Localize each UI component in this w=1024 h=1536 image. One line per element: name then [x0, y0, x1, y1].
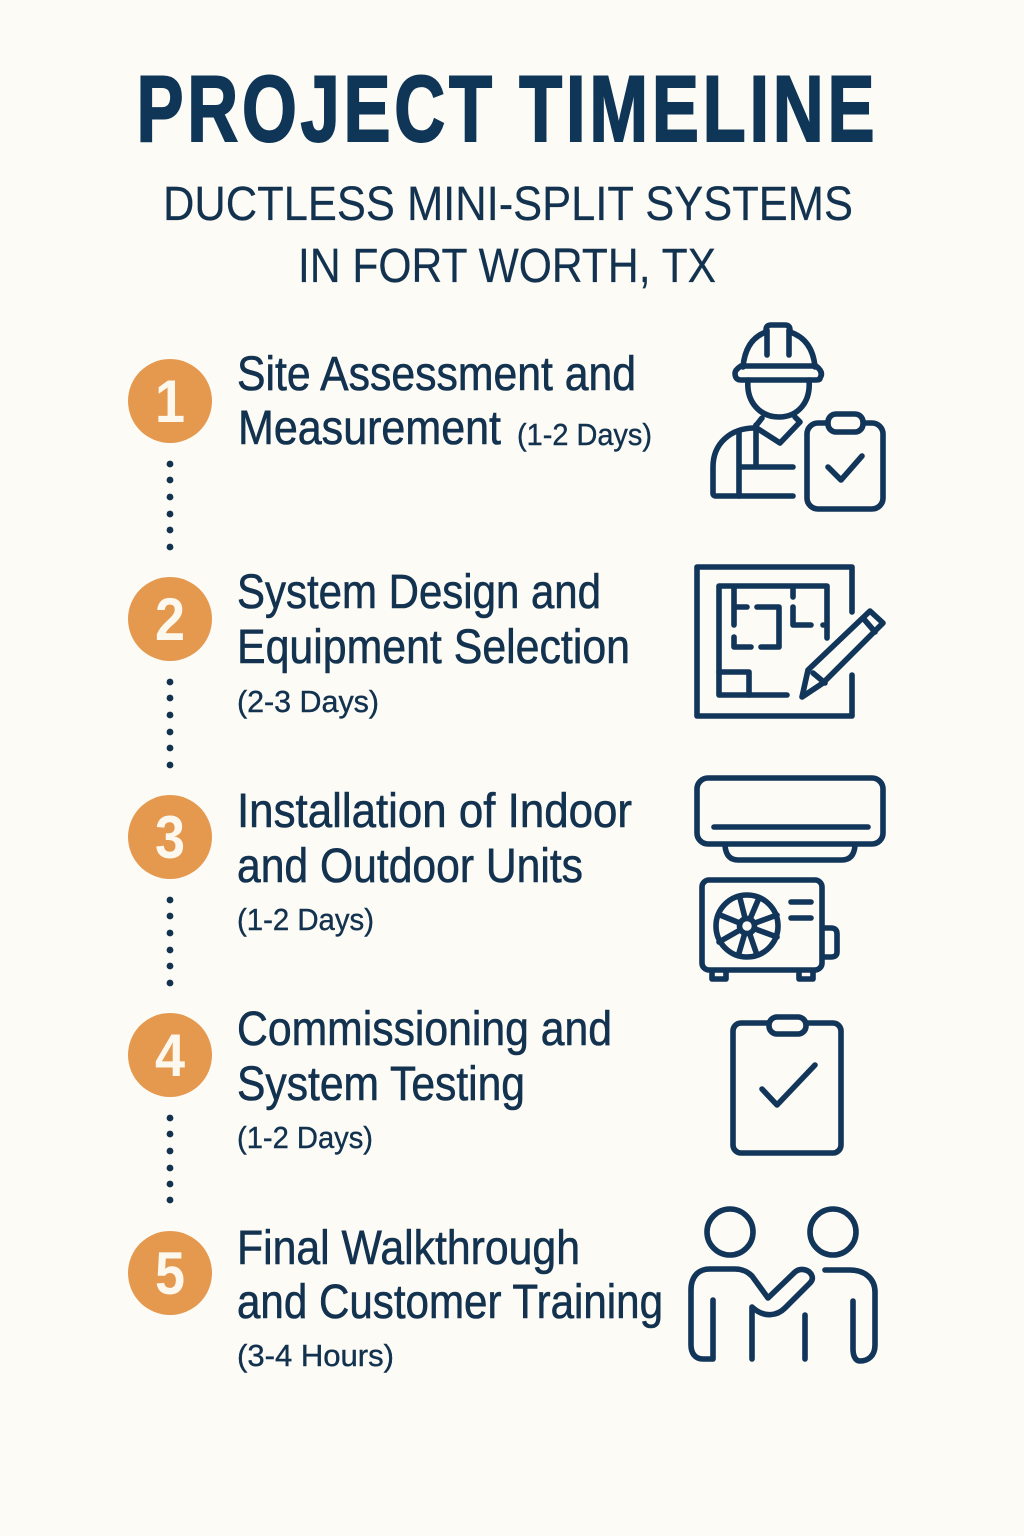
step 1 number badge: 1 — [155, 368, 185, 436]
step 1 text — [237, 348, 652, 455]
step 5 number badge — [128, 1231, 212, 1315]
step 1 number badge — [128, 359, 212, 443]
icon: handshake of two people — [691, 1209, 875, 1361]
step 3 — [128, 778, 883, 986]
icon: floor plan and pencil — [697, 567, 883, 716]
step 1 text: Measurement — [238, 402, 501, 455]
step 4 — [128, 1003, 841, 1203]
step 4 connector dots — [167, 1115, 173, 1203]
step 4 text: System Testing — [237, 1058, 525, 1111]
subtitle: IN FORT WORTH, TX — [298, 240, 716, 293]
step 3 text — [237, 785, 632, 937]
step 2 number badge: 2 — [155, 586, 185, 654]
step 5 text: and Customer Training — [237, 1276, 663, 1329]
step 3 text: (1-2 Days) — [237, 902, 374, 937]
step 3 number badge — [128, 795, 212, 879]
step 1 text: Site Assessment and — [237, 348, 636, 401]
step 4 number badge — [128, 1013, 212, 1097]
step 5 text: Final Walkthrough — [237, 1222, 580, 1275]
step 4 text — [237, 1003, 612, 1155]
step 5 text: (3-4 Hours) — [237, 1338, 394, 1373]
step 1 — [128, 325, 883, 550]
step 3 text: Installation of Indoor — [237, 785, 632, 838]
step 5 text — [237, 1222, 663, 1373]
step 2 text — [237, 566, 630, 719]
step 2 text: System Design and — [237, 566, 601, 619]
icon: worker with clipboard — [713, 325, 883, 509]
icon: indoor and outdoor units — [697, 778, 883, 979]
step 4 number badge: 4 — [155, 1022, 185, 1090]
icon: clipboard with check — [733, 1017, 841, 1153]
step 1 connector dots — [167, 461, 173, 550]
step 2 connector dots — [167, 679, 173, 768]
step 2 text: Equipment Selection — [237, 621, 630, 674]
step 2 — [128, 566, 883, 768]
step 1 text: (1-2 Days) — [517, 417, 652, 452]
step 2 number badge — [128, 577, 212, 661]
step 2 text: (2-3 Days) — [237, 684, 379, 719]
step 5 — [128, 1209, 875, 1373]
subtitle — [163, 178, 853, 293]
step 3 connector dots — [167, 897, 173, 986]
subtitle: DUCTLESS MINI-SPLIT SYSTEMS — [163, 178, 853, 231]
step 4 text: Commissioning and — [237, 1003, 612, 1056]
step 4 text: (1-2 Days) — [237, 1120, 373, 1155]
step 3 number badge: 3 — [155, 804, 185, 872]
title: PROJECT TIMELINE — [136, 56, 875, 161]
step 5 number badge: 5 — [155, 1240, 185, 1308]
step 3 text: and Outdoor Units — [237, 840, 583, 893]
